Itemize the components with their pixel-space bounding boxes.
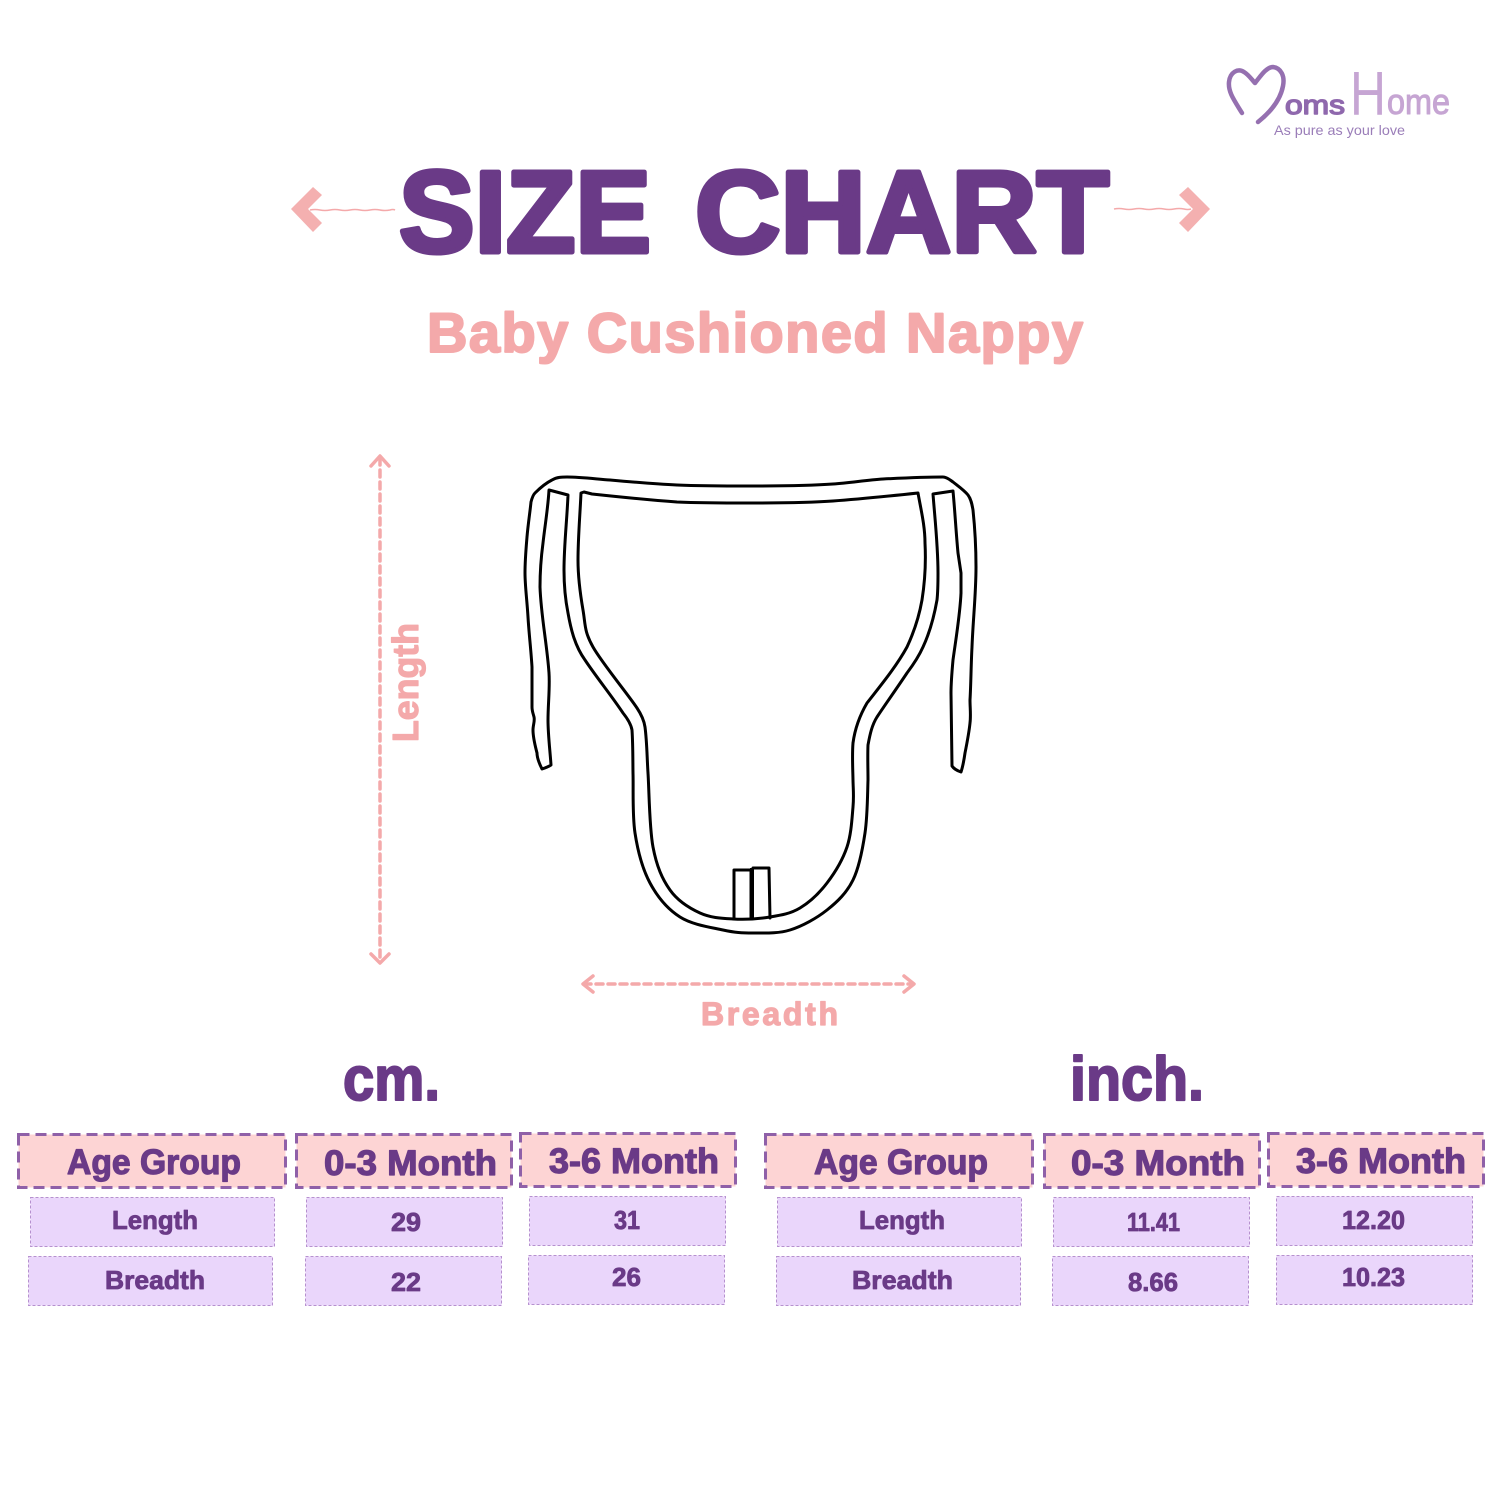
value: breadth 3-6 [1276, 1256, 1472, 1304]
value: breadth 3-6: 10.23 [1342, 1262, 1405, 1292]
value: length 0-3: 29 [391, 1207, 421, 1237]
panel: cm table [18, 1134, 736, 1306]
value: breadth 0-3 [1052, 1256, 1248, 1306]
logo word oms: oms [1285, 90, 1345, 120]
logo letter H: H [1350, 60, 1386, 129]
row label: breadth [28, 1256, 272, 1306]
header: 3-6 month [520, 1134, 736, 1186]
header: 3-6 month [1268, 1134, 1484, 1186]
header: 0-3 month [1044, 1134, 1260, 1188]
header: 0-3 month: 0-3 Month [1071, 1144, 1245, 1183]
row label: length [778, 1198, 1022, 1246]
value: length 3-6 [1276, 1196, 1472, 1246]
logo heart M [1229, 67, 1284, 122]
logo tagline: As pure as your love [1274, 122, 1405, 138]
arrow: breadth [583, 976, 914, 992]
arrow: title left [291, 187, 395, 232]
header: 3-6 month: 3-6 Month [549, 1142, 719, 1181]
logo: MomsHome [1229, 60, 1450, 138]
row label: breadth [776, 1256, 1020, 1306]
value: length 0-3 [1054, 1198, 1250, 1246]
subtitle: Baby Cushioned Nappy [427, 301, 1083, 364]
row label: length [30, 1198, 274, 1246]
value: length 3-6 [530, 1196, 726, 1246]
header: 0-3 month [296, 1134, 512, 1188]
row label: breadth: Breadth [852, 1265, 953, 1295]
panel: inch table [766, 1134, 1484, 1306]
value: breadth 0-3: 22 [391, 1267, 421, 1297]
value: length 0-3: 11.41 [1127, 1207, 1180, 1237]
header: age group: Age Group [67, 1143, 241, 1182]
header: age group [18, 1134, 286, 1188]
heading: cm: cm. [343, 1045, 440, 1114]
label: length: Length [385, 623, 426, 742]
value: length 0-3 [306, 1198, 502, 1246]
value: breadth 3-6 [528, 1256, 724, 1304]
header: age group: Age Group [814, 1143, 988, 1182]
label: breadth: Breadth [701, 996, 838, 1032]
title [399, 147, 1109, 277]
arrow: title right [1114, 187, 1210, 232]
value: length 3-6: 31 [614, 1205, 640, 1235]
value: length 3-6: 12.20 [1342, 1205, 1405, 1235]
row label: breadth: Breadth [105, 1265, 205, 1295]
title: CHART [695, 147, 1109, 277]
heading: inch: inch. [1070, 1045, 1204, 1114]
nappy fastening tabs [734, 868, 770, 918]
value: breadth 3-6: 26 [612, 1262, 641, 1292]
header: age group [766, 1134, 1032, 1188]
header: 0-3 month: 0-3 Month [324, 1144, 497, 1183]
illustration: nappy outline [525, 477, 976, 933]
arrow: length [371, 456, 389, 963]
title: SIZE [399, 147, 651, 277]
value: breadth 0-3: 8.66 [1128, 1267, 1178, 1297]
row label: length: Length [112, 1205, 198, 1235]
logo word ome: ome [1387, 81, 1450, 122]
value: breadth 0-3 [306, 1256, 502, 1306]
header: 3-6 month: 3-6 Month [1296, 1142, 1466, 1181]
row label: length: Length [859, 1205, 945, 1235]
